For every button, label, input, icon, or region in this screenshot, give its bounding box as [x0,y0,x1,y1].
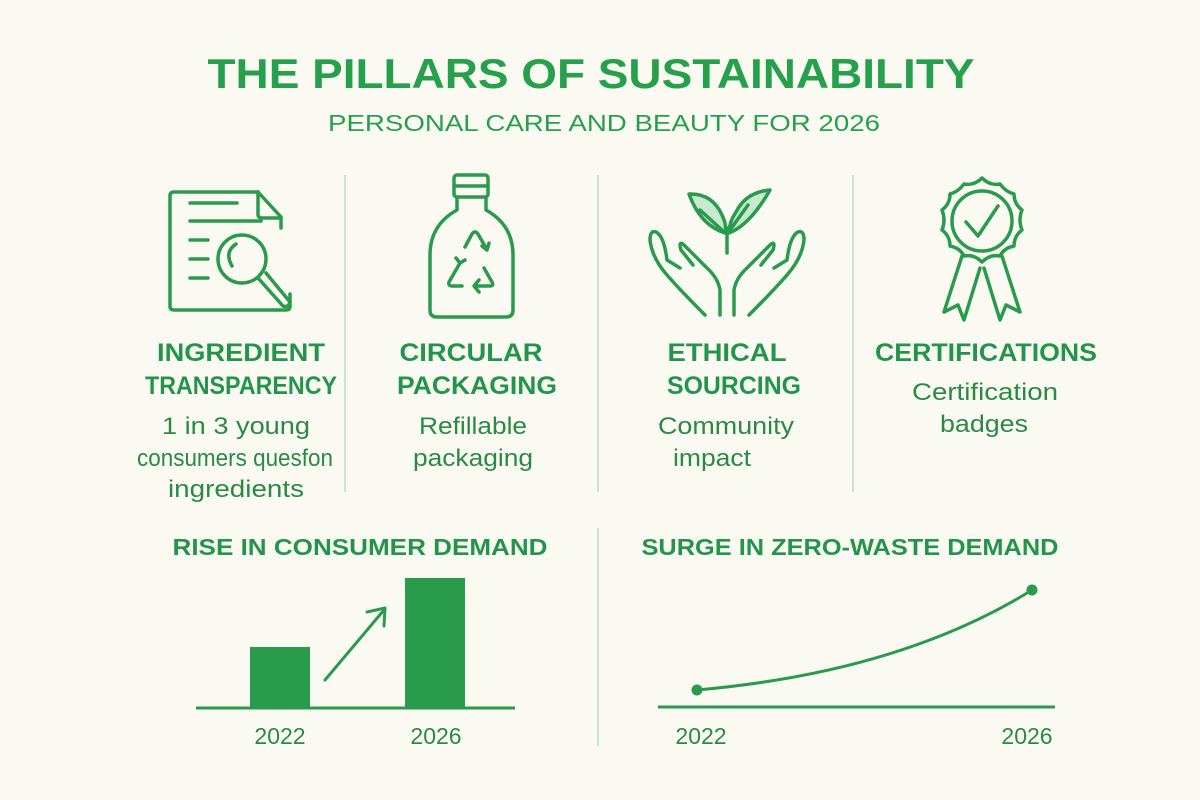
icon: recycle bottle [430,175,513,317]
title: THE PILLARS OF SUSTAINABILITY [208,50,975,97]
pillar 1: ingredient transparency: ingredients [168,476,304,503]
pillar 2: circular packaging: packaging [413,445,533,472]
pillar 3: ethical sourcing [658,339,801,472]
pillar 1: ingredient transparency: 1 in 3 young [162,413,310,440]
pillar 4: certifications: CERTIFICATIONS [875,339,1097,367]
pillar 2: circular packaging: CIRCULAR [400,339,542,367]
pillar 2: circular packaging [397,339,557,472]
pillar 2: circular packaging: PACKAGING [397,372,557,400]
heading: surge in zero-waste demand: SURGE IN ZERO-WASTE DEMAND [642,534,1058,560]
arrow [325,608,385,680]
icon: hands with sprout [650,190,804,315]
pillar 1: ingredient transparency [137,339,337,503]
pillar 1: ingredient transparency: TRANSPARENCY [145,372,337,400]
bar chart: 2026 [410,723,462,749]
bar chart: 2022 [254,723,306,749]
pillar 3: ethical sourcing: impact [673,445,751,472]
icon: certification badge [942,178,1022,320]
subtitle: PERSONAL CARE AND BEAUTY FOR 2026 [328,110,880,136]
pillar 4: certifications: Certification [912,379,1058,406]
line chart: 2026 [1001,723,1053,749]
line chart: 2022 [675,723,727,749]
pillar 3: ethical sourcing: Community [658,413,794,440]
pillar 3: ethical sourcing: ETHICAL [668,339,786,367]
line chart [658,584,1055,749]
bar chart [196,578,515,749]
pillar 4: certifications [875,339,1097,438]
heading: rise in consumer demand: RISE IN CONSUMER DEMAND [172,534,548,560]
pillar 1: ingredient transparency: INGREDIENT [157,339,325,367]
pillar 3: ethical sourcing: SOURCING [667,372,801,400]
icon: document with magnifier [170,192,290,310]
pillar 4: certifications: badges [940,411,1028,438]
pillar 1: ingredient transparency: consumers quesfon [137,445,333,472]
pillar 2: circular packaging: Refillable [419,413,527,440]
